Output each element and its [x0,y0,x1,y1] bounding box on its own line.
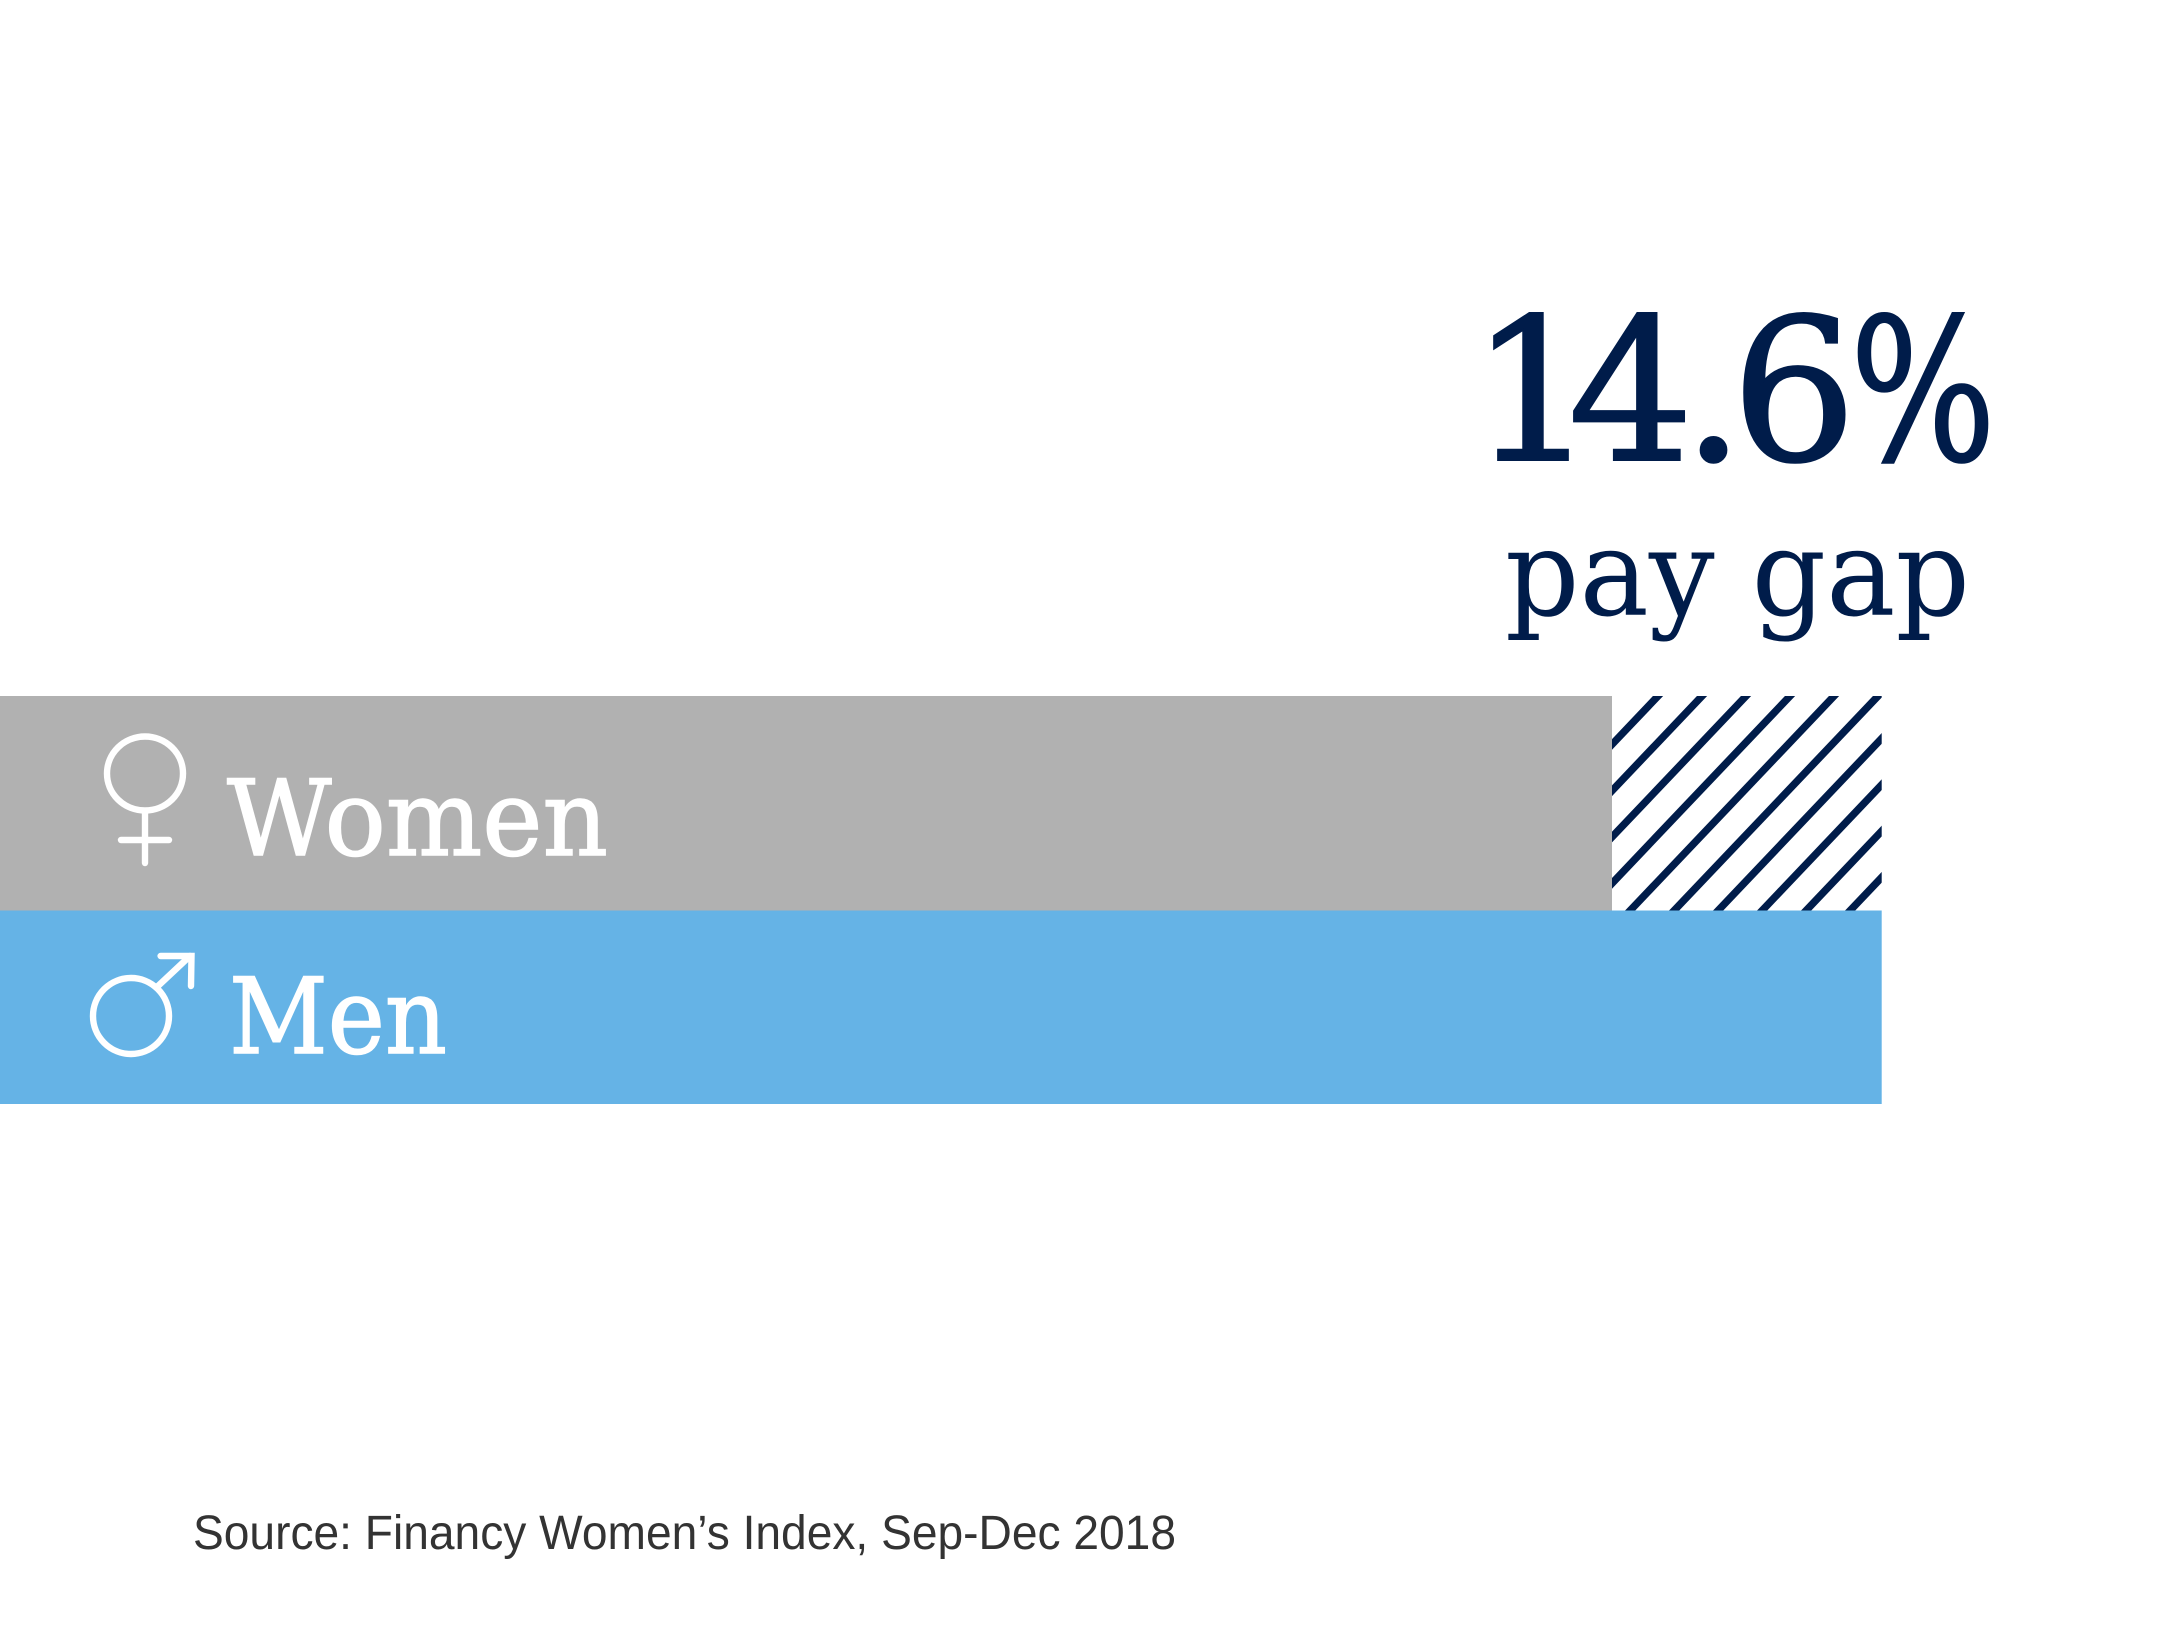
subheading: pay gap: pay gap [1505,505,1970,644]
heading: 14.6% statistic: 14.6 [1470,276,1857,507]
hatched pay gap area [1612,696,1882,910]
icon: female symbol [107,736,183,863]
source note: Source: Financy Women’s Index, Sep-Dec 2018 [193,1507,1176,1560]
infographic: gender pay gap [0,312,1988,1559]
bar: women [0,696,1612,910]
icon: male symbol [93,956,192,1054]
bar: men [0,910,1882,1104]
heading: 14.6% statistic: % [1850,276,1996,507]
label: Women: Women [227,758,608,880]
label: Men: Men [229,956,447,1078]
